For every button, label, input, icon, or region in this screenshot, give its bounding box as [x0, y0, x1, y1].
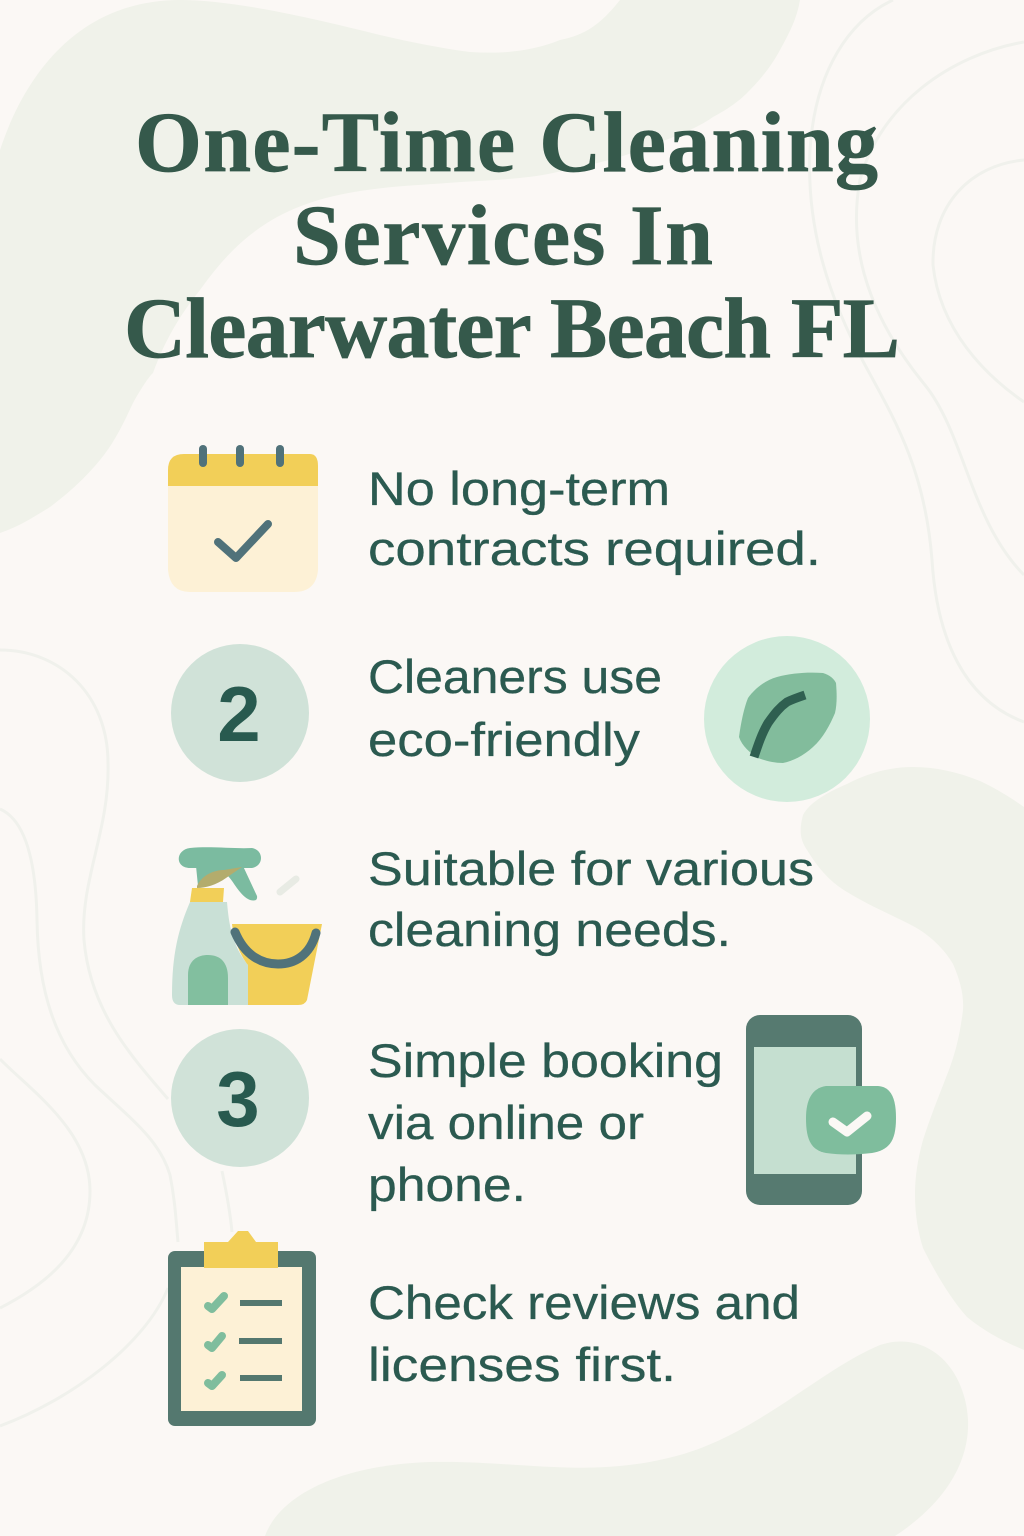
text: simple booking	[368, 1034, 723, 1211]
text: suitable for various cleaning needs	[368, 842, 814, 956]
icon: spray bottle and bucket	[172, 847, 322, 1005]
number badge 2: 2	[217, 670, 261, 758]
text: check reviews and licenses: Check reviews and	[368, 1276, 800, 1329]
number badge 3: 3	[216, 1055, 260, 1143]
title	[124, 94, 900, 376]
icon: leaf in circle	[704, 636, 870, 802]
icon: phone with check badge	[746, 1015, 896, 1205]
text: cleaners use eco-friendly	[368, 650, 662, 766]
text: check reviews and licenses: licenses first.	[368, 1338, 676, 1391]
text: simple booking: via online or	[368, 1096, 644, 1149]
title: One-Time Cleaning	[135, 94, 878, 190]
text: cleaners use eco-friendly: eco-friendly	[368, 713, 641, 766]
text: suitable for various cleaning needs: cleaning needs.	[368, 903, 731, 956]
icon: calendar with check	[168, 449, 318, 592]
text: cleaners use eco-friendly: Cleaners use	[368, 650, 662, 703]
text: check reviews and licenses	[368, 1276, 800, 1391]
text: no long-term contracts	[368, 462, 821, 575]
number badge 2	[171, 644, 309, 782]
title: Clearwater Beach FL	[124, 280, 900, 376]
icon: clipboard checklist	[168, 1231, 316, 1426]
text: suitable for various cleaning needs: Suitable for various	[368, 842, 814, 895]
number badge 3	[171, 1029, 309, 1167]
text: no long-term contracts: contracts required.	[368, 522, 821, 575]
title: Services In	[293, 187, 713, 283]
text: no long-term contracts: No long-term	[368, 462, 670, 515]
text: simple booking: phone.	[368, 1158, 526, 1211]
text: simple booking: Simple booking	[368, 1034, 723, 1087]
